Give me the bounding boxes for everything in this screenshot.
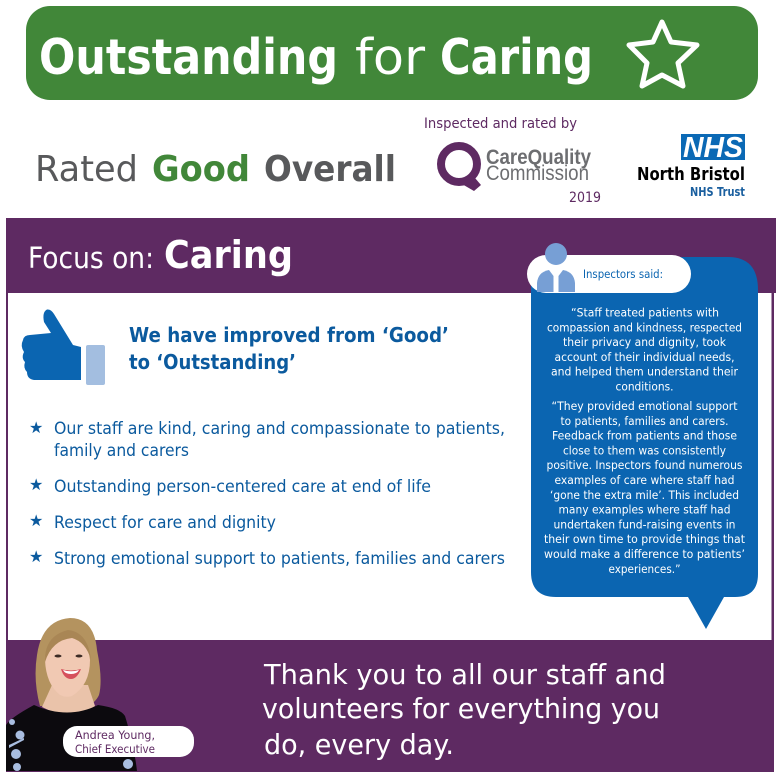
quote text: compassion and kindness, respected bbox=[547, 321, 742, 334]
title banner bbox=[26, 6, 758, 100]
logo: Care Quality Commission bbox=[441, 145, 601, 206]
quote text: many examples where staff had bbox=[558, 504, 730, 517]
title: Caring bbox=[440, 29, 593, 86]
panel: focus on caring bbox=[6, 218, 776, 641]
quote text: experiences.” bbox=[608, 563, 680, 576]
quote text: undertaken fund-raising events in bbox=[554, 518, 736, 531]
rating heading: Good bbox=[152, 149, 250, 190]
panel: focus on caring: Caring bbox=[164, 233, 293, 277]
subheading: to ‘Outstanding’ bbox=[129, 350, 296, 374]
subheading: We have improved from ‘Good’ bbox=[129, 323, 449, 347]
logo: Care Quality Commission: CareQuality bbox=[486, 145, 591, 169]
bullet list: ★ bbox=[29, 547, 43, 566]
panel heading: Focus on: bbox=[28, 241, 154, 275]
quote text: conditions. bbox=[616, 380, 674, 394]
logo: NHS North Bristol: NHS bbox=[683, 132, 744, 164]
quote text: ‘gone the extra mile’. This included bbox=[550, 489, 739, 502]
quote text: their own time to provide things that bbox=[544, 533, 746, 546]
logo: NHS North Bristol: NHS Trust bbox=[690, 184, 745, 199]
quote text: “They provided emotional support bbox=[552, 400, 738, 413]
name label: Andrea Young, bbox=[75, 728, 155, 742]
black top bbox=[6, 705, 137, 771]
quote text: and helped them understand their bbox=[551, 366, 738, 379]
logo: NHS North Bristol bbox=[637, 132, 745, 199]
icon: thumbs up bbox=[22, 309, 105, 385]
name label bbox=[63, 726, 194, 757]
logo: Care Quality Commission: 2019 bbox=[569, 190, 601, 206]
thank you message: volunteers for everything you bbox=[262, 692, 660, 725]
face bbox=[45, 637, 90, 697]
hair fringe bbox=[45, 630, 91, 662]
quote text: positive. Inspectors found numerous bbox=[546, 459, 743, 472]
floral sleeve bbox=[9, 719, 133, 771]
quote text: close to them was consistently bbox=[563, 444, 726, 457]
quote text bbox=[544, 306, 746, 576]
logo: NHS North Bristol: North Bristol bbox=[637, 164, 745, 185]
bubble label bbox=[527, 255, 691, 293]
name label: Chief Executive bbox=[75, 742, 155, 756]
bullet list: Outstanding person-centered care at end of life bbox=[54, 477, 431, 496]
bullet list: ★ bbox=[29, 511, 43, 530]
quote text: to patients, families and carers. bbox=[560, 415, 728, 428]
title bbox=[39, 29, 593, 86]
quote text: examples of care where staff had bbox=[554, 474, 734, 487]
quote text: Feedback from patients and those bbox=[552, 430, 737, 443]
bullet list: family and carers bbox=[54, 441, 189, 460]
hair bbox=[36, 618, 101, 707]
bullet list: Respect for care and dignity bbox=[54, 513, 276, 532]
subheading bbox=[129, 323, 449, 374]
title: for bbox=[355, 29, 426, 86]
panel: thank you footer bbox=[6, 641, 774, 772]
icon: star bbox=[629, 22, 697, 86]
bubble label: Inspectors said: bbox=[583, 267, 663, 281]
title: Outstanding bbox=[39, 29, 338, 86]
quote text: “Staff treated patients with bbox=[571, 306, 719, 320]
bullet list: Strong emotional support to patients, families and carers bbox=[54, 549, 505, 568]
eyes bbox=[54, 654, 82, 658]
portrait: Andrea Young bbox=[6, 618, 137, 771]
rating heading: Rated bbox=[35, 149, 138, 190]
icon: person bbox=[537, 243, 575, 292]
bullet list: ★ bbox=[29, 418, 43, 437]
thank you message bbox=[262, 658, 666, 761]
bullet list: Our staff are kind, caring and compassionate to patients, bbox=[54, 419, 505, 438]
thank you message: do, every day. bbox=[264, 728, 454, 761]
quote text: would make a difference to patients’ bbox=[544, 548, 745, 561]
rating heading: Overall bbox=[264, 149, 396, 190]
rating heading bbox=[35, 149, 396, 190]
logo: Care Quality Commission: Commission bbox=[486, 162, 589, 185]
inspected and rated by: Inspected and rated by bbox=[424, 116, 577, 132]
bullet list bbox=[29, 418, 505, 568]
speech bubble: inspectors said bbox=[527, 243, 758, 629]
bullet list: ★ bbox=[29, 475, 43, 494]
thank you message: Thank you to all our staff and bbox=[263, 658, 666, 691]
smile bbox=[61, 669, 81, 679]
quote text: their privacy and dignity, took bbox=[563, 336, 726, 349]
neck bbox=[42, 685, 95, 714]
quote text: account of their individual needs, bbox=[554, 351, 734, 364]
